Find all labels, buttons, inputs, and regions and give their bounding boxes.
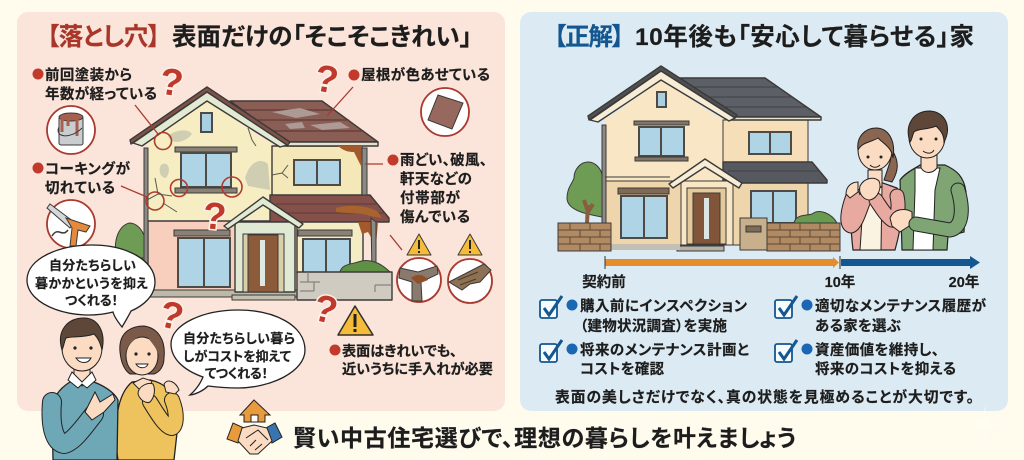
mailbox	[740, 218, 767, 250]
man	[900, 111, 966, 250]
speech bubble: right	[171, 310, 305, 395]
speech bubble: right: しがコストを抑えて	[183, 349, 291, 364]
label: caulking: 切れている	[45, 180, 115, 197]
timeline: 10年	[825, 273, 855, 291]
label: surface note: 近いうちに手入れが必要	[342, 361, 493, 378]
brick wall: right	[767, 223, 840, 251]
window: lower right	[298, 230, 352, 286]
label: roof fade: 屋根が色あせている	[361, 66, 490, 84]
checklist item: inspection	[540, 296, 747, 335]
illustration: worn house	[115, 87, 402, 300]
checklist item: asset value	[775, 340, 956, 378]
checklist item: inspection: （建物状況調査）を実施	[580, 317, 728, 335]
brick wall: left	[558, 223, 611, 251]
icon: warning small left	[407, 234, 431, 255]
man	[52, 318, 118, 460]
label: fittings damage: 雨どい、破風、	[400, 152, 487, 169]
panel note: 表面の美しさだけでなく、真の状態を見極めることが大切です。	[555, 388, 974, 406]
label: fittings damage: 付帯部が	[400, 189, 461, 207]
speech bubble: left: 暮かかというを抑え	[35, 276, 148, 291]
couple: left	[52, 318, 179, 460]
question marks: ?	[155, 293, 188, 340]
porch and door	[224, 197, 303, 300]
window: upper right	[749, 132, 791, 154]
icon: roof tile	[421, 88, 469, 136]
checklist item: inspection: 購入前にインスペクション	[580, 297, 747, 315]
question marks: ?	[201, 195, 228, 239]
icon: damaged gutter	[397, 258, 441, 302]
window: upper left	[634, 121, 689, 161]
label: fittings damage: 傷んでいる	[400, 208, 470, 226]
man's sleeve	[916, 190, 961, 230]
speech bubble: left: 自分たちらしい	[49, 258, 136, 273]
closing message: 賢い中古住宅選びで、理想の暮らしを叶えましょう	[293, 425, 796, 451]
porch and door	[669, 159, 742, 251]
label: repaint age: 年数が経っている	[45, 85, 157, 103]
label: surface note	[330, 343, 493, 378]
window: upper	[175, 147, 237, 193]
timeline: 契約前	[582, 273, 626, 291]
label: surface note: 表面はきれいでも、	[342, 343, 457, 360]
heading: pitfall	[47, 23, 472, 51]
timeline: 20年	[949, 273, 979, 291]
icon: paint can	[47, 106, 95, 154]
question marks: ?	[157, 61, 186, 105]
woman	[116, 326, 179, 460]
checklist item: asset value: 資産価値を維持し、	[815, 341, 939, 359]
icon: damaged board	[448, 259, 492, 303]
checklist item: maintenance plan: 将来のメンテナンス計画と	[580, 341, 749, 359]
panel: correct answer	[520, 12, 1008, 411]
speech bubble: right: てつくれる！	[204, 366, 268, 381]
window: lower right	[751, 191, 796, 223]
speech bubble: right: 自分たちらしい暮ら	[183, 331, 295, 346]
window: lower left	[174, 230, 230, 287]
heading: pitfall: 【落とし穴】	[47, 23, 160, 51]
timeline	[582, 256, 980, 291]
label: fittings damage: 軒天などの	[400, 170, 472, 188]
heading: pitfall: 表面だけの「そこそこきれい」	[172, 23, 472, 51]
question marks	[155, 57, 342, 340]
question marks: ?	[311, 57, 342, 103]
label: repaint age	[32, 66, 157, 103]
label: repaint age: 前回塗装から	[45, 66, 132, 84]
icon: warning large	[338, 306, 373, 335]
question marks: ?	[309, 287, 342, 333]
woman	[846, 128, 912, 250]
window: lower left	[618, 188, 669, 238]
checklist item: maintenance plan: コストを確認	[580, 361, 664, 378]
checklist item: history	[775, 296, 987, 335]
speech bubble: left: つくれる！	[65, 293, 118, 308]
checklist item: asset value: 将来のコストを抑える	[815, 360, 956, 378]
checklist item: maintenance plan	[540, 340, 749, 378]
speech bubble: left	[27, 245, 155, 327]
heading: correct answer: 10年後も「安心して暮らせる」家	[635, 23, 974, 51]
illustration: good house	[558, 66, 840, 251]
checklist item: history: ある家を選ぶ	[815, 318, 902, 335]
label: fittings damage	[388, 152, 487, 226]
icon: handshake and house	[227, 400, 282, 454]
panel: pitfall	[17, 12, 505, 411]
icon: warning small right	[458, 234, 482, 255]
icon: caulking gun	[47, 200, 95, 248]
label: caulking: コーキングが	[45, 160, 131, 178]
sparkle	[970, 406, 1000, 444]
heading: correct answer: 【正解】	[554, 23, 624, 51]
label: caulking	[32, 160, 131, 197]
tree	[567, 162, 602, 223]
checklist item: history: 適切なメンテナンス履歴が	[815, 297, 987, 315]
couple: right	[846, 111, 966, 250]
